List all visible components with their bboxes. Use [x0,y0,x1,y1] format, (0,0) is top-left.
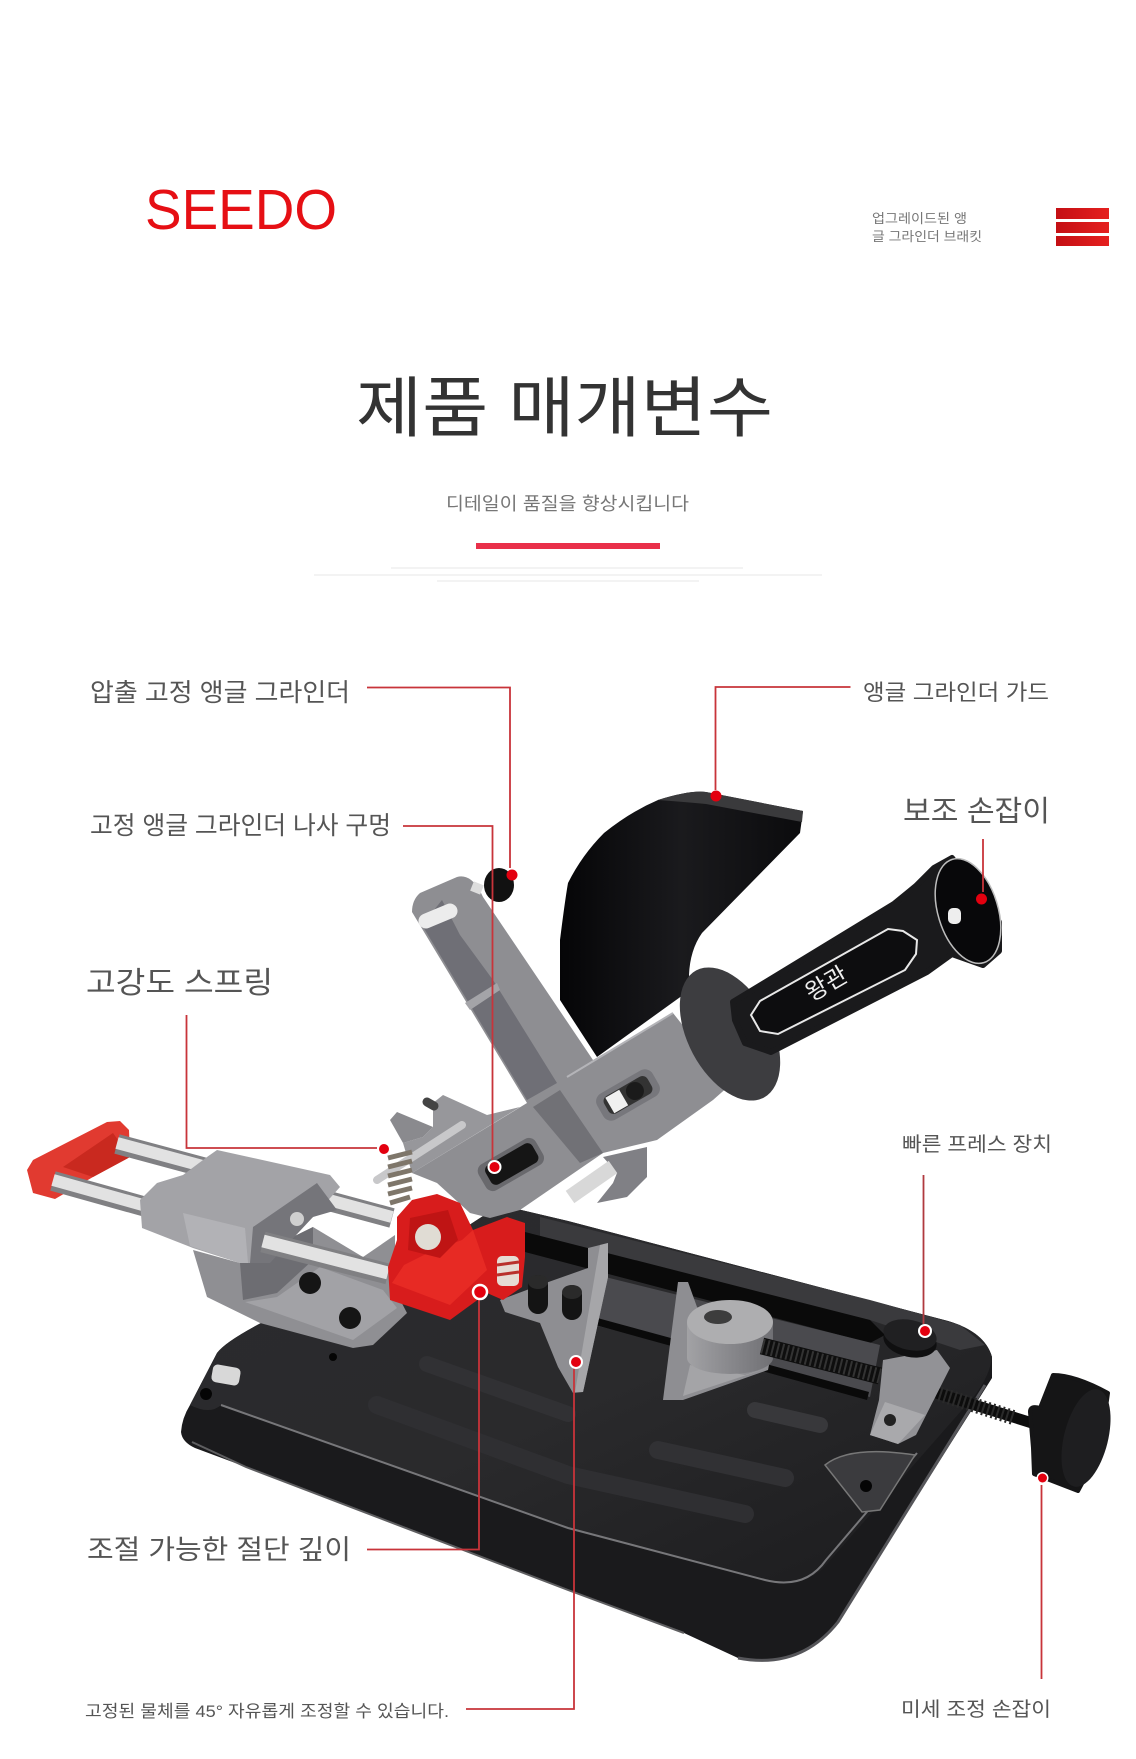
clamp ring and pin [570,1147,647,1203]
spring [388,1152,412,1203]
title: 제품 매개변수 [356,371,773,445]
lead screw [762,1346,1032,1423]
grooves [377,1364,820,1514]
callout: screw hole: 고정 앵글 그라인더 나사 구멍 [90,812,391,840]
base plate [181,1205,992,1661]
side handle [659,851,1012,1117]
lower slot [475,1135,547,1194]
callout: grinder guard [710,680,1049,802]
slide rail [540,1217,985,1350]
header tagline: 업그레이드된 앵 [872,211,967,226]
pivot stub and top bolt [426,911,450,921]
grip label panel [751,929,917,1034]
callout: screw hole [90,812,502,1174]
callout: grinder guard: 앵글 그라인더 가드 [863,680,1049,705]
callout: 45 degree adjustment: 고정된 물체를 45° 자유롭게 조정할 수 있습니다. [85,1702,449,1721]
gray sliding jaw [140,1150,407,1348]
end block [870,1315,950,1444]
corner mounts [825,1452,915,1512]
callout: quick press device: 빠른 프레스 장치 [902,1133,1052,1156]
brand logo: SEEDO [145,178,337,242]
subtitle: 디테일이 품질을 향상시킵니다 [446,494,689,514]
inner channel [422,900,557,1100]
red jaw handle [27,1121,130,1199]
arm body [412,876,730,1218]
callout: high strength spring: 고강도 스프링 [86,967,273,1000]
angle grinder guard [560,792,803,1057]
header tagline: 글 그라인더 브래킷 [872,229,982,244]
angled fence [500,1243,608,1393]
callout: press fixing grinder [90,679,518,880]
jaw rods [53,1143,392,1236]
callout: fine adjustment handle: 미세 조정 손잡이 [901,1698,1051,1721]
faint fine print [314,567,822,582]
fine adjustment knob [1030,1375,1119,1492]
V-shaped grinder arm [377,792,803,1320]
callout: adjustable cutting depth [87,1285,487,1565]
callout: adjustable cutting depth: 조절 가능한 절단 깊이 [87,1535,351,1565]
grip brand text: 왕관 [801,962,853,1007]
callout: quick press device [902,1133,1052,1338]
callout: fine adjustment handle [901,1472,1051,1721]
icon: red menu bars [1056,208,1109,246]
header tagline [872,211,982,244]
product photo: angle grinder stand [27,792,1119,1661]
red accent bar [476,543,660,549]
rear plate and ear [403,1095,520,1173]
callout: auxiliary handle: 보조 손잡이 [903,796,1050,828]
red pivot bracket [388,1194,525,1320]
callout: 45 degree adjustment [85,1355,583,1721]
slider clamp block [663,1282,773,1400]
callout: press fixing grinder: 압출 고정 앵글 그라인더 [90,679,350,707]
callout: high strength spring [86,967,391,1156]
upper slot [593,1066,663,1124]
callout: auxiliary handle [903,796,1050,904]
